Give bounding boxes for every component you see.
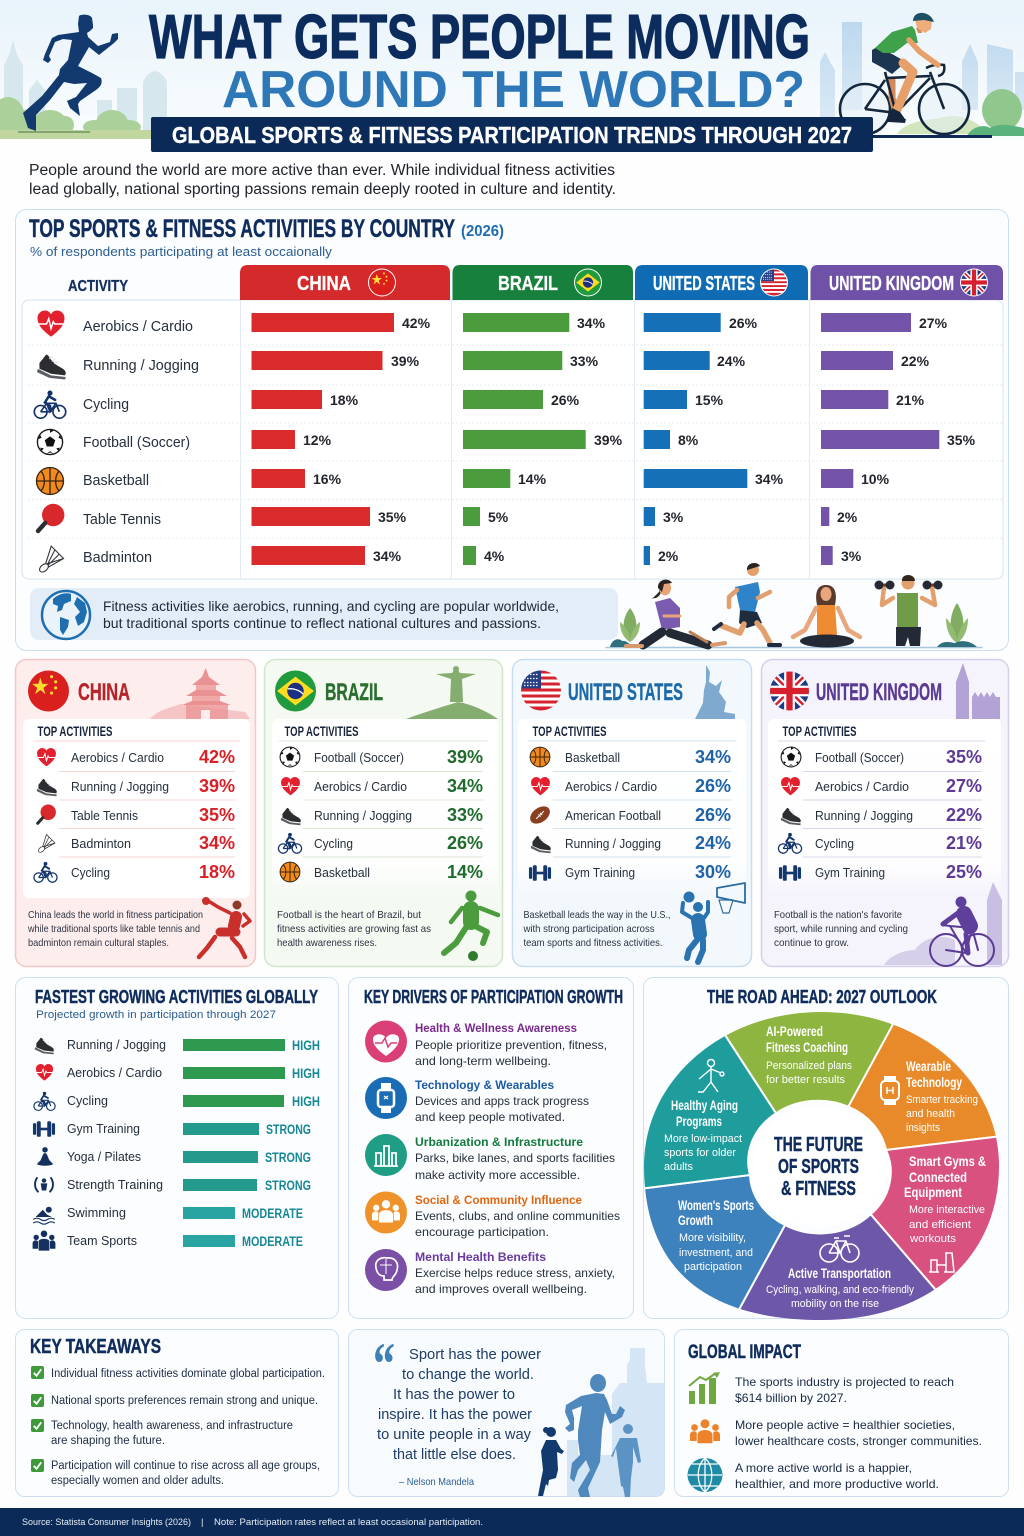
wheel segment: AI-powered fitness coaching: AI-Powered xyxy=(766,1024,823,1039)
driver: urbanization and infrastructure: make activity more accessible. xyxy=(415,1168,580,1182)
row: cycling HIGH: HIGH xyxy=(292,1094,320,1109)
list: Brazil top activities: Running / Jogging xyxy=(314,809,412,823)
driver: health and wellness: People prioritize prevention, fitness, xyxy=(415,1038,607,1052)
text: United States note xyxy=(523,909,670,949)
bar chart: United States: 8% xyxy=(678,432,699,448)
panel heading: Projected growth in participation through 2027 xyxy=(36,1009,276,1021)
column header: Brazil: BRAZIL xyxy=(498,273,558,295)
takeaway 1: Individual fitness activities dominate global participation. xyxy=(51,1368,325,1380)
driver: technology and wearables: and keep people motivated. xyxy=(415,1110,565,1124)
text: Brazil note: health awareness rises. xyxy=(277,937,377,949)
driver: social and community xyxy=(365,1192,620,1239)
bar chart: China: 35% xyxy=(378,509,407,525)
text: Brazil note: Football is the heart of Brazil, but xyxy=(277,909,421,921)
subtitle banner xyxy=(151,117,873,152)
wheel segment: active transportation xyxy=(740,1214,936,1320)
wheel hub: THE FUTURE xyxy=(774,1134,863,1156)
driver: urbanization and infrastructure xyxy=(365,1134,615,1182)
wheel segment: healthy aging programs: sports for older xyxy=(664,1147,736,1159)
wheel segment: active transportation: mobility on the rise xyxy=(791,1298,879,1310)
impact: productive world: healthier, and more productive world. xyxy=(735,1477,939,1491)
quote text: – Nelson Mandela xyxy=(399,1476,474,1488)
takeaway 4: Participation will continue to rise across all age groups, xyxy=(51,1460,320,1472)
bar chart: United States xyxy=(644,313,784,565)
title: AROUND THE WORLD? xyxy=(222,61,805,119)
row: table tennis: Table Tennis xyxy=(83,512,161,528)
wheel segment: women's sports growth: participation xyxy=(684,1261,742,1273)
column label: activity: ACTIVITY xyxy=(68,278,128,295)
wheel segment: wearable technology: Smarter tracking xyxy=(906,1094,978,1106)
driver: urbanization and infrastructure: Parks, bike lanes, and sports facilities xyxy=(415,1151,615,1165)
quote text: Sport has the power xyxy=(409,1346,541,1363)
row: running / jogging HIGH xyxy=(35,1038,320,1054)
driver: social and community: Social & Community Influence xyxy=(415,1193,582,1207)
wheel segment: healthy aging programs: More low-impact xyxy=(664,1133,742,1145)
list: Brazil top activities: 39% xyxy=(447,747,483,767)
footer xyxy=(0,1508,1024,1536)
bar chart: United States: 24% xyxy=(717,353,746,369)
bar chart: United States: 3% xyxy=(663,509,684,525)
wheel segment: healthy aging programs: adults xyxy=(664,1161,693,1173)
text: China note: while traditional sports like table tennis and xyxy=(27,923,200,935)
quote text: to change the world. xyxy=(402,1366,534,1383)
text: China note: badminton remain cultural staples. xyxy=(28,937,169,949)
quotation mark: “ xyxy=(373,1331,395,1397)
list: United States top activities: 30% xyxy=(695,862,731,882)
panel heading: TOP SPORTS & FITNESS ACTIVITIES BY COUNTRY xyxy=(29,215,455,243)
text: Brazil note xyxy=(277,909,431,949)
landmark: Big Ben and Parliament xyxy=(956,663,1000,719)
panel heading: GLOBAL IMPACT xyxy=(688,1342,801,1363)
woman stretching xyxy=(626,580,725,646)
row: swimming MODERATE: MODERATE xyxy=(242,1206,303,1221)
list: United Kingdom top activities: 22% xyxy=(946,805,982,825)
panel: fastest growing activities globally xyxy=(16,978,338,1318)
row: team sports MODERATE: MODERATE xyxy=(242,1234,303,1249)
bar chart: Brazil: 4% xyxy=(484,548,505,564)
wheel segment: women's sports growth: Women's Sports xyxy=(678,1198,754,1213)
wheel segment: wearable technology: Wearable xyxy=(906,1059,951,1074)
list: United Kingdom top activities: Cycling xyxy=(815,837,854,851)
list: Brazil top activities: Basketball xyxy=(314,866,370,880)
column header: China xyxy=(240,265,450,300)
panel: Brazil xyxy=(264,660,502,966)
list: United Kingdom top activities: 27% xyxy=(946,776,982,796)
list: China top activities: Badminton xyxy=(71,837,131,851)
callout: fitness and tradition xyxy=(30,588,618,640)
driver: mental health xyxy=(365,1249,615,1296)
driver: mental health: Exercise helps reduce stress, anxiety, xyxy=(415,1266,615,1280)
list: United Kingdom top activities: Football (Soccer) xyxy=(815,751,904,765)
row: strength training STRONG: STRONG xyxy=(265,1178,311,1193)
text: China note xyxy=(27,909,203,949)
bar chart: China: 16% xyxy=(313,471,342,487)
bar chart: China xyxy=(252,313,431,565)
list: China top activities: Running / Jogging xyxy=(71,780,169,794)
illustration: basketball player and hoop xyxy=(682,883,745,962)
panel: United Kingdom: UNITED KINGDOM xyxy=(816,679,942,706)
icon: smartwatch xyxy=(881,1076,899,1105)
quote text: inspire. It has the power xyxy=(378,1406,532,1423)
driver: health and wellness: Health & Wellness Awareness xyxy=(415,1021,577,1035)
impact: healthier societies: lower healthcare costs, stronger communities. xyxy=(735,1434,982,1448)
takeaway 4: especially women and older adults. xyxy=(51,1475,224,1487)
list: United Kingdom top activities: 25% xyxy=(946,862,982,882)
list: United Kingdom top activities: Running / Jogging xyxy=(815,809,913,823)
list: Brazil top activities: TOP ACTIVITIES xyxy=(284,724,358,739)
text: China note: China leads the world in fitness participation xyxy=(28,909,203,921)
list: United States top activities: Gym Training xyxy=(565,866,635,880)
list: Brazil top activities: 33% xyxy=(447,805,483,825)
row: cycling xyxy=(34,391,129,418)
impact: healthier societies xyxy=(690,1418,982,1448)
man running xyxy=(714,563,780,645)
row: strength training STRONG: Strength Training xyxy=(67,1178,163,1192)
intro text: lead globally, national sporting passions remain deeply rooted in culture and identity. xyxy=(29,181,616,198)
wheel segment: wearable technology: and health xyxy=(906,1108,955,1120)
bar chart: United States: 15% xyxy=(695,392,724,408)
bar chart: United Kingdom: 21% xyxy=(896,392,925,408)
driver: technology and wearables: Technology & Wearables xyxy=(415,1078,554,1092)
wheel segment: wearable technology xyxy=(848,1024,996,1149)
row: running / jogging HIGH: HIGH xyxy=(292,1038,320,1053)
callout: fitness and tradition: Fitness activities like aerobics, running, and cycling are popular worldwide, xyxy=(103,599,559,614)
list: United States top activities: 24% xyxy=(695,833,731,853)
bar chart: Brazil: 14% xyxy=(518,471,547,487)
wheel segment: smart gyms: and efficient xyxy=(909,1219,971,1231)
panel heading: % of respondents participating at least occaionally xyxy=(30,244,333,259)
panel: key drivers of participation growth xyxy=(348,978,634,1318)
column header: United Kingdom xyxy=(810,265,1003,300)
impact: sports industry xyxy=(689,1372,954,1405)
panel: China xyxy=(16,660,256,966)
list: United Kingdom top activities: Gym Training xyxy=(815,866,885,880)
impact: productive world: A more active world is a happier, xyxy=(735,1461,912,1475)
panel: China: CHINA xyxy=(78,679,130,706)
column header: China: CHINA xyxy=(297,273,351,295)
list: United Kingdom top activities xyxy=(778,724,985,882)
row: aerobics / cardio HIGH: HIGH xyxy=(292,1066,320,1081)
list: Brazil top activities: Cycling xyxy=(314,837,353,851)
quote text xyxy=(377,1346,541,1488)
bar chart: United Kingdom xyxy=(821,313,976,565)
panel heading: (2026) xyxy=(461,223,504,240)
driver: social and community: Events, clubs, and online communities xyxy=(415,1209,620,1223)
footer: Note: Participation rates reflect at least occasional participation. xyxy=(214,1517,483,1528)
text: United States note: Basketball leads the way in the U.S., xyxy=(524,909,670,921)
bar chart: United Kingdom: 3% xyxy=(841,548,862,564)
wheel segment: wearable technology: insights xyxy=(906,1122,940,1134)
driver: health and wellness xyxy=(365,1020,607,1068)
list: United Kingdom top activities: TOP ACTIVITIES xyxy=(782,724,856,739)
panel: Nelson Mandela quote xyxy=(348,1330,664,1497)
bar chart: United States: 34% xyxy=(755,471,784,487)
impact: productive world xyxy=(688,1458,939,1492)
panel: United States: UNITED STATES xyxy=(568,679,683,706)
icon: runner silhouette xyxy=(18,15,118,132)
impact: sports industry: The sports industry is projected to reach xyxy=(735,1375,954,1389)
bar chart: Brazil xyxy=(463,313,623,565)
list: China top activities: Table Tennis xyxy=(71,809,138,823)
icon: cyclist xyxy=(840,13,969,134)
takeaway 2: National sports preferences remain strong and unique. xyxy=(51,1395,318,1407)
panel heading: FASTEST GROWING ACTIVITIES GLOBALLY xyxy=(35,987,318,1007)
illustration: people exercising xyxy=(606,563,982,648)
illustration: city and runners xyxy=(538,1348,664,1497)
takeaway 4 xyxy=(31,1459,320,1487)
plants xyxy=(610,603,977,647)
list: United States top activities: 26% xyxy=(695,776,731,796)
intro text xyxy=(29,162,616,198)
driver: technology and wearables xyxy=(365,1077,589,1124)
list: United Kingdom top activities: Aerobics / Cardio xyxy=(815,780,909,794)
table frame xyxy=(22,300,1003,579)
column header: Brazil xyxy=(452,265,633,300)
wheel hub: & FITNESS xyxy=(781,1178,856,1200)
row: strength training STRONG xyxy=(35,1177,311,1193)
row: yoga / pilates STRONG: Yoga / Pilates xyxy=(67,1150,141,1164)
wheel segment: women's sports growth: investment, and xyxy=(679,1247,753,1259)
impact: healthier societies: More people active = healthier societies, xyxy=(735,1418,955,1432)
list: Brazil top activities: 14% xyxy=(447,862,483,882)
list: China top activities: 42% xyxy=(199,747,235,767)
takeaway 3: are shaping the future. xyxy=(51,1435,165,1447)
list: Brazil top activities: 26% xyxy=(447,833,483,853)
row: yoga / pilates STRONG xyxy=(37,1147,311,1166)
impact: sports industry: $614 billion by 2027. xyxy=(735,1391,847,1405)
text: United States note: with strong participation across xyxy=(523,923,654,935)
bar chart: United Kingdom: 22% xyxy=(901,353,930,369)
list: China top activities: Aerobics / Cardio xyxy=(71,751,164,765)
icon: growth chart xyxy=(689,1372,720,1404)
row: table tennis xyxy=(38,504,161,531)
text: Brazil note: fitness activities are growing fast as xyxy=(277,923,431,935)
wheel segment: active transportation: Active Transportation xyxy=(788,1266,891,1281)
row: cycling: Cycling xyxy=(83,397,129,413)
text: United Kingdom note xyxy=(774,909,908,949)
bar chart: China: 34% xyxy=(373,548,402,564)
quote text: to unite people in a way xyxy=(377,1426,531,1443)
text: United Kingdom note: Football is the nation's favorite xyxy=(774,909,902,921)
landmark: temple of heaven xyxy=(150,668,250,719)
row: basketball: Basketball xyxy=(83,473,149,489)
panel: United Kingdom xyxy=(762,660,1008,966)
row: basketball xyxy=(36,468,149,494)
list: China top activities: 39% xyxy=(199,776,235,796)
wheel segment: healthy aging programs: Programs xyxy=(676,1114,722,1129)
bar chart: Brazil: 34% xyxy=(577,315,606,331)
panel: United States xyxy=(512,660,752,966)
list: China top activities: 18% xyxy=(199,862,235,882)
panel heading: KEY TAKEAWAYS xyxy=(30,1336,161,1358)
row: aerobics / cardio HIGH: Aerobics / Cardio xyxy=(67,1066,162,1080)
row: gym training STRONG: STRONG xyxy=(266,1122,311,1137)
row: aerobics / cardio HIGH xyxy=(36,1064,320,1081)
driver: social and community: encourage participation. xyxy=(415,1225,549,1239)
driver: health and wellness: and long-term wellbeing. xyxy=(415,1054,551,1068)
panel: global impact xyxy=(674,1330,1008,1496)
header illustration: sky, skyline and park xyxy=(0,0,1024,139)
takeaway 3: Technology, health awareness, and infrastructure xyxy=(51,1420,293,1432)
wheel segment: AI-powered fitness coaching: Personalized plans xyxy=(766,1060,852,1072)
panel: Brazil: BRAZIL xyxy=(325,679,383,706)
wheel hub: OF SPORTS xyxy=(778,1156,859,1178)
panel heading: THE ROAD AHEAD: 2027 OUTLOOK xyxy=(707,987,937,1007)
bar chart: Brazil: 5% xyxy=(488,509,509,525)
panel heading xyxy=(29,215,504,259)
column header: United States: UNITED STATES xyxy=(653,273,755,295)
wheel segment: AI-powered fitness coaching: Fitness Coaching xyxy=(766,1040,848,1055)
list: United States top activities: Running / Jogging xyxy=(565,837,661,851)
bar chart: United States: 26% xyxy=(729,315,758,331)
wheel segment: women's sports growth xyxy=(645,1176,786,1309)
bar chart: Brazil: 26% xyxy=(551,392,580,408)
wheel segment: smart gyms: Smart Gyms & xyxy=(909,1154,986,1169)
bar chart: Brazil: 33% xyxy=(570,353,599,369)
list: United States top activities: 26% xyxy=(695,805,731,825)
column header: United Kingdom: UNITED KINGDOM xyxy=(829,273,954,295)
wheel segment: AI-powered fitness coaching: for better results xyxy=(766,1074,845,1086)
list: China top activities: Cycling xyxy=(71,866,110,880)
intro text: People around the world are more active than ever. While individual fitness activities xyxy=(29,162,615,179)
illustration: cyclist and tower xyxy=(884,882,1002,966)
footer: | xyxy=(201,1517,203,1528)
panel: the road ahead 2027 outlook xyxy=(643,977,1009,1320)
panel: top sports and fitness activities by country xyxy=(16,210,1008,650)
landmark: Christ the Redeemer xyxy=(406,666,498,719)
list: China top activities: 35% xyxy=(199,805,235,825)
driver: mental health: and improves overall wellbeing. xyxy=(415,1282,587,1296)
illustration: soccer player xyxy=(444,890,498,961)
bar chart: United Kingdom: 27% xyxy=(919,315,948,331)
row: cycling HIGH: Cycling xyxy=(67,1094,108,1108)
subtitle banner: GLOBAL SPORTS & FITNESS PARTICIPATION TRENDS THROUGH 2027 xyxy=(172,122,852,148)
row: gym training STRONG xyxy=(33,1121,311,1137)
list: United States top activities: 34% xyxy=(695,747,731,767)
list: United States top activities xyxy=(527,724,736,882)
list: United Kingdom top activities: 21% xyxy=(946,833,982,853)
wheel segment: smart gyms: Connected xyxy=(909,1170,967,1185)
column header: United States xyxy=(635,265,808,300)
row: football xyxy=(37,429,190,455)
row: swimming MODERATE xyxy=(33,1206,303,1224)
bar chart: China: 39% xyxy=(391,353,420,369)
wheel segment: smart gyms: workouts xyxy=(909,1233,957,1245)
bar chart: United States: 2% xyxy=(658,548,679,564)
wheel segment: AI-powered fitness coaching xyxy=(726,1012,892,1112)
callout: fitness and tradition: but traditional sports continue to reflect national cultures and passions. xyxy=(103,616,541,631)
panel: key takeaways xyxy=(16,1330,338,1496)
quote text: It has the power to xyxy=(393,1386,515,1403)
wheel segment: smart gyms: Equipment xyxy=(904,1185,962,1200)
list: United Kingdom top activities: 35% xyxy=(946,747,982,767)
wheel hub xyxy=(750,1106,888,1226)
list: United States top activities: Aerobics / Cardio xyxy=(565,780,657,794)
wheel segment: wearable technology: Technology xyxy=(906,1075,962,1090)
wheel segment: healthy aging programs: Healthy Aging xyxy=(671,1098,738,1113)
row: badminton xyxy=(38,546,152,574)
bar chart: United Kingdom: 10% xyxy=(861,471,890,487)
row: badminton: Badminton xyxy=(83,550,152,566)
wheel segment: healthy aging programs xyxy=(644,1036,776,1190)
list: China top activities: 34% xyxy=(199,833,235,853)
list: Brazil top activities: Football (Soccer) xyxy=(314,751,404,765)
row: cycling HIGH xyxy=(34,1092,320,1110)
icon: older adult walking xyxy=(698,1060,724,1092)
row: swimming MODERATE: Swimming xyxy=(67,1206,126,1220)
row: aerobics / cardio xyxy=(38,310,193,337)
list: Brazil top activities xyxy=(278,724,488,882)
list: Brazil top activities: Aerobics / Cardio xyxy=(314,780,407,794)
bar chart: United Kingdom: 2% xyxy=(837,509,858,525)
wheel segment: women's sports growth: More visibility, xyxy=(679,1232,746,1244)
text: United Kingdom note: continue to grow. xyxy=(774,937,849,949)
row: running / jogging: Running / Jogging xyxy=(83,358,199,374)
bar chart: Brazil: 39% xyxy=(594,432,623,448)
woman meditating xyxy=(793,585,860,648)
wheel segment: women's sports growth: Growth xyxy=(678,1213,713,1228)
bar chart: China: 12% xyxy=(303,432,332,448)
row: aerobics / cardio: Aerobics / Cardio xyxy=(83,319,193,335)
row: running / jogging xyxy=(37,355,199,380)
list: China top activities xyxy=(33,724,240,882)
icon: network globe xyxy=(688,1458,722,1492)
icon: gym machine xyxy=(929,1253,954,1272)
icon: globe xyxy=(42,591,90,639)
panel heading: KEY DRIVERS OF PARTICIPATION GROWTH xyxy=(364,987,623,1007)
bar chart: China: 42% xyxy=(402,315,431,331)
wheel segment: smart gyms xyxy=(872,1136,999,1289)
list: United States top activities: Basketball xyxy=(565,751,620,765)
row: team sports MODERATE xyxy=(33,1230,303,1251)
takeaway 3 xyxy=(31,1419,293,1447)
row: team sports MODERATE: Team Sports xyxy=(67,1234,137,1248)
list: United States top activities: TOP ACTIVITIES xyxy=(532,724,606,739)
footer: Source: Statista Consumer Insights (2026) xyxy=(22,1517,191,1528)
list: Brazil top activities: 34% xyxy=(447,776,483,796)
driver: technology and wearables: Devices and apps track progress xyxy=(415,1094,589,1108)
row: running / jogging HIGH: Running / Jogging xyxy=(67,1038,166,1052)
list: United States top activities: American Football xyxy=(565,809,661,823)
panel heading xyxy=(35,987,318,1021)
title xyxy=(149,3,810,119)
quote text: that little else does. xyxy=(393,1446,516,1463)
bar chart: United Kingdom: 35% xyxy=(947,432,976,448)
driver: urbanization and infrastructure: Urbanization & Infrastructure xyxy=(415,1135,583,1149)
row: football: Football (Soccer) xyxy=(83,435,190,451)
row: gym training STRONG: Gym Training xyxy=(67,1122,140,1136)
illustration: table tennis player xyxy=(199,897,250,957)
text: United Kingdom note: sport, while running and cycling xyxy=(774,923,908,935)
list: China top activities: TOP ACTIVITIES xyxy=(38,724,112,739)
landmark: Statue of Liberty xyxy=(695,665,735,719)
driver: mental health: Mental Health Benefits xyxy=(415,1250,546,1264)
icon: bicycle xyxy=(820,1236,859,1262)
row: yoga / pilates STRONG: STRONG xyxy=(265,1150,311,1165)
man lifting dumbbells xyxy=(874,575,942,646)
wheel segment: smart gyms: More interactive xyxy=(909,1204,985,1216)
wheel segment: active transportation: Cycling, walking, and eco-friendly xyxy=(766,1284,914,1296)
text: United States note: team sports and fitness activities. xyxy=(524,937,662,949)
bar chart: China: 18% xyxy=(330,392,359,408)
